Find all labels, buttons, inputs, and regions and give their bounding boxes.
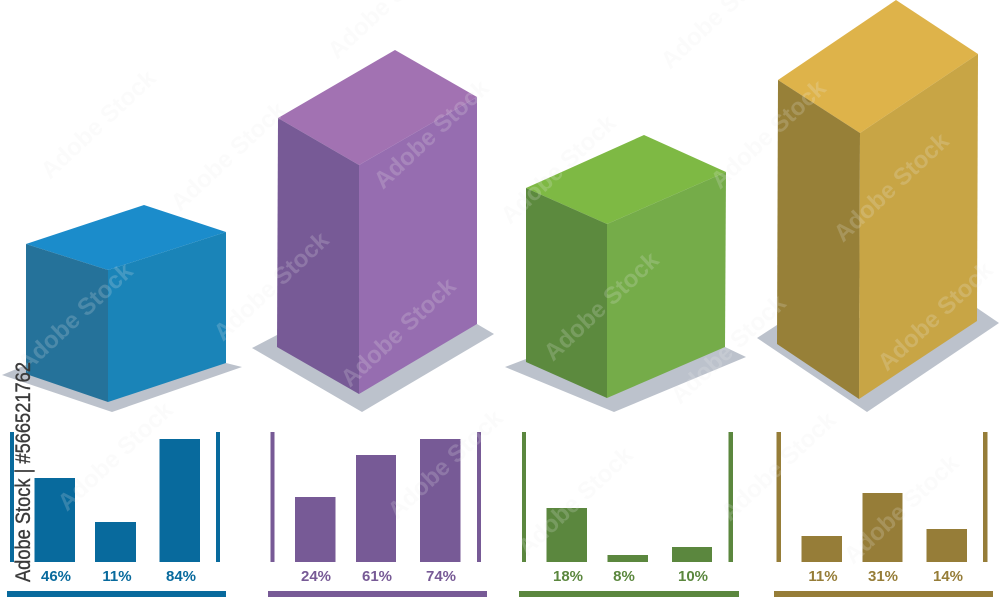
- vertical stock id text: Adobe Stock | #566521762: [12, 362, 35, 582]
- watermark pattern: Adobe Stock: [716, 406, 842, 526]
- bar chart: blue: 46%: [41, 568, 71, 585]
- bar chart: green: 8%: [613, 568, 635, 585]
- green block with shadow: [505, 135, 746, 412]
- bar chart: green: [519, 432, 739, 597]
- bar chart: green: 18%: [553, 568, 583, 585]
- bar chart: yellow: 31%: [868, 568, 898, 585]
- bar chart: yellow: 14%: [933, 568, 963, 585]
- purple block with shadow: [252, 50, 494, 412]
- yellow block with shadow: [757, 0, 999, 412]
- watermark pattern: Adobe Stock: [369, 74, 495, 194]
- bar chart: yellow: [774, 432, 993, 597]
- watermark pattern: Adobe Stock: [666, 289, 792, 409]
- bar chart: purple: [268, 432, 487, 597]
- bar chart: purple: 74%: [426, 568, 456, 585]
- bar chart: blue: 11%: [102, 568, 132, 585]
- watermark pattern: Adobe Stock: [873, 256, 999, 376]
- blue cube with shadow: [2, 205, 242, 412]
- watermark pattern: Adobe Stock: [36, 64, 162, 184]
- bar chart: yellow: 11%: [808, 568, 838, 585]
- bar chart: blue: [7, 432, 226, 597]
- bar chart: green: 10%: [678, 568, 708, 585]
- watermark pattern: Adobe Stock: [166, 96, 292, 216]
- watermark pattern: Adobe Stock: [13, 257, 139, 377]
- watermark pattern: Adobe Stock: [209, 226, 335, 346]
- watermark pattern: Adobe Stock: [383, 404, 509, 524]
- watermark pattern: Adobe Stock: [539, 246, 665, 366]
- bar chart: blue: 84%: [166, 568, 196, 585]
- watermark pattern: Adobe Stock: [829, 127, 955, 247]
- watermark pattern: Adobe Stock: [839, 449, 965, 569]
- watermark pattern: Adobe Stock: [706, 74, 832, 194]
- bar chart: purple: 61%: [362, 568, 392, 585]
- watermark pattern: Adobe Stock: [53, 396, 179, 516]
- bar chart: purple: 24%: [301, 568, 331, 585]
- watermark pattern: Adobe Stock: [513, 441, 639, 561]
- watermark pattern: Adobe Stock: [336, 272, 462, 392]
- watermark pattern: Adobe Stock: [496, 109, 622, 229]
